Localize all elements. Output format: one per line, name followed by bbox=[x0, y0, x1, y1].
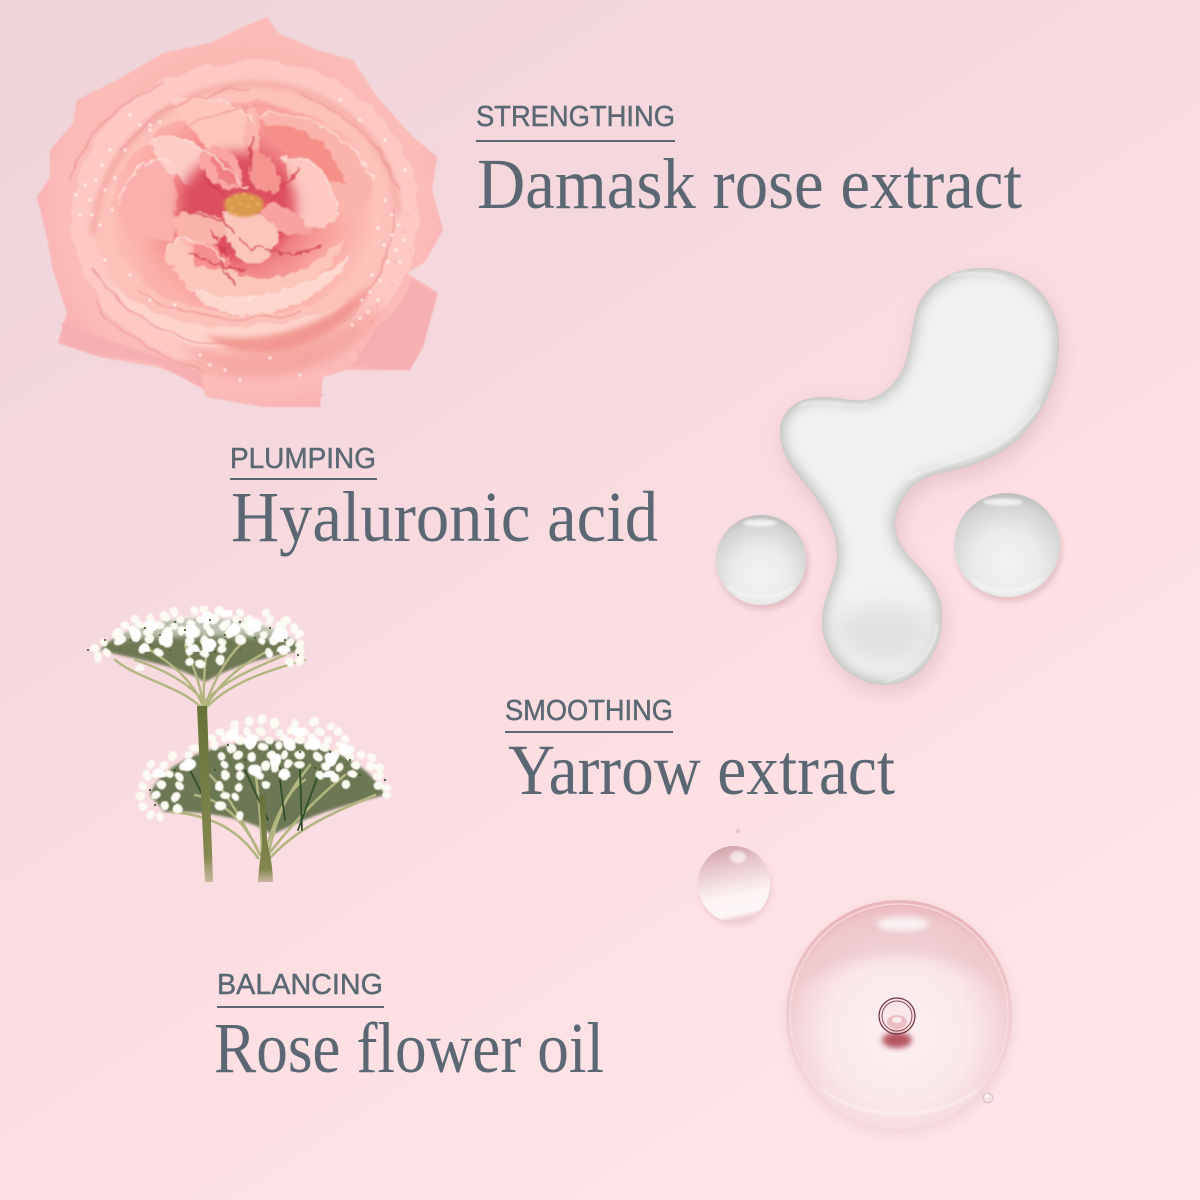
label group: rose flower oil bbox=[214, 969, 604, 1088]
ingredient name: rose flower oil: Rose flower oil bbox=[214, 1008, 604, 1088]
label group: damask rose extract bbox=[476, 101, 1022, 224]
droplet: left bbox=[716, 515, 809, 610]
rose dew drops bbox=[76, 100, 410, 395]
ingredient name: damask rose extract: Damask rose extract bbox=[477, 144, 1022, 224]
rose mid petals bbox=[118, 97, 373, 316]
image: rose oil droplets bbox=[698, 828, 1013, 1134]
label group: yarrow extract bbox=[505, 695, 895, 810]
ingredient name: yarrow extract: Yarrow extract bbox=[508, 730, 895, 810]
category label: strengthing: STRENGTHING bbox=[476, 101, 675, 133]
rose inner heart bbox=[120, 97, 372, 298]
category label: smoothing: SMOOTHING bbox=[505, 695, 673, 727]
rose stamens bbox=[224, 193, 264, 217]
image: yarrow flowers bbox=[88, 609, 388, 882]
label group: hyaluronic acid bbox=[230, 443, 658, 557]
large oil drop bbox=[786, 900, 1013, 1134]
category label: plumping: PLUMPING bbox=[230, 443, 376, 475]
image: clear gel blob with droplets bbox=[716, 260, 1070, 693]
centre bubble bbox=[879, 998, 915, 1048]
yarrow stems bbox=[197, 706, 273, 882]
yarrow front flower head bbox=[140, 719, 388, 858]
yarrow back flower head bbox=[88, 609, 305, 708]
droplet: right bbox=[954, 493, 1062, 602]
small oil droplet bbox=[698, 828, 771, 925]
category label: balancing: BALANCING bbox=[217, 969, 383, 1001]
image: damask rose bbox=[37, 17, 443, 407]
tiny oil droplet bbox=[983, 1093, 993, 1103]
ingredient name: hyaluronic acid: Hyaluronic acid bbox=[231, 477, 658, 557]
